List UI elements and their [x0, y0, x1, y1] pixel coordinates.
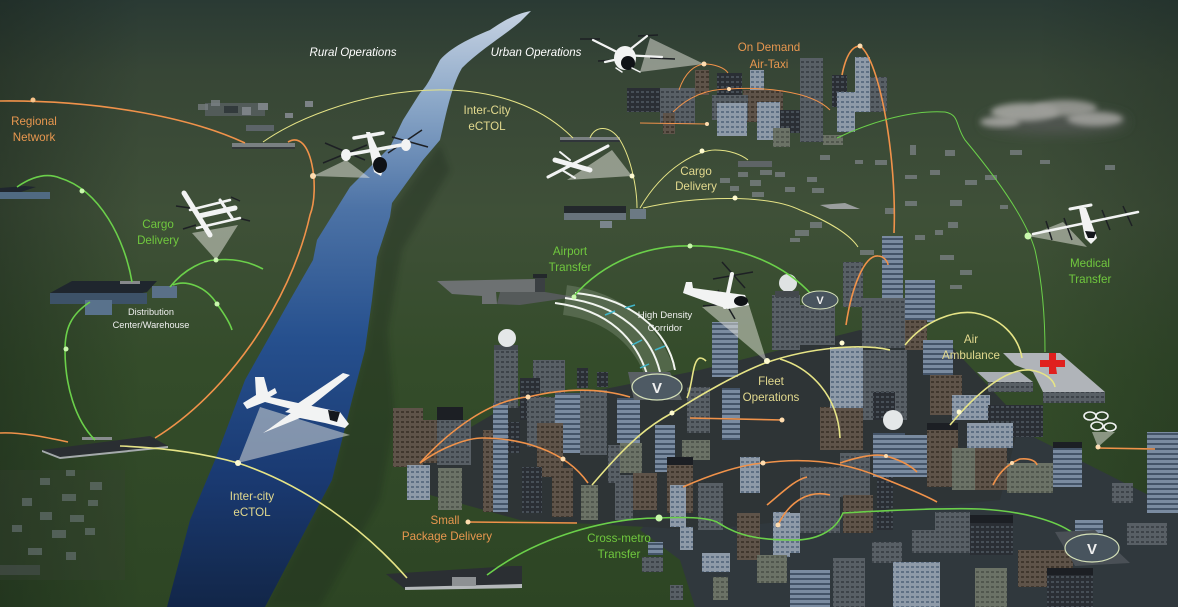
high density corridor — [555, 293, 675, 374]
cloud — [980, 100, 1127, 134]
label: cargo delivery top: Delivery — [675, 180, 717, 193]
vertiport pad: fleet — [802, 291, 838, 309]
hospital — [977, 353, 1105, 403]
vertiport pad: corridor — [628, 372, 682, 400]
cargo terminal and inter-city vertiport — [560, 137, 772, 228]
label: cross-metro transfer: Transfer — [598, 548, 640, 561]
main city towers — [393, 329, 1178, 607]
label: on demand air-taxi: On Demand — [738, 41, 800, 54]
label: medical transfer: Transfer — [1069, 273, 1111, 286]
label: high density corridor: High Density — [638, 310, 692, 321]
label: regional network: Network — [13, 131, 55, 144]
label: distribution center: Center/Warehouse — [113, 320, 189, 330]
label: air ambulance: Air — [964, 333, 978, 346]
label: inter-city eCTOL top: eCTOL — [468, 120, 506, 133]
label: on demand air-taxi: Air-Taxi — [750, 58, 788, 71]
city ground — [640, 420, 1178, 607]
label: fleet operations: Fleet — [758, 375, 785, 388]
label: inter-city eCTOL top: Inter-City — [463, 104, 511, 117]
vertiport pad: south-east — [1055, 530, 1130, 566]
mid city towers — [712, 236, 935, 377]
label: air ambulance: Ambulance — [942, 349, 1000, 362]
label: inter-city eCTOL river: eCTOL — [233, 506, 271, 519]
aircraft: intercity eCTOL over river — [238, 373, 350, 463]
label: cargo delivery top: Cargo — [680, 165, 712, 178]
label: inter-city eCTOL river: Inter-city — [230, 490, 274, 503]
label: distribution center: Distribution — [128, 307, 174, 317]
aircraft: air taxi — [580, 35, 704, 72]
label: rural operations: Rural Operations — [310, 47, 397, 59]
label: cargo delivery left: Delivery — [137, 234, 179, 247]
label: urban operations: Urban Operations — [491, 47, 582, 59]
label: cargo delivery left: Cargo — [142, 218, 174, 231]
orange routes — [0, 46, 1155, 525]
aircraft: delivery drone — [1084, 412, 1116, 447]
aircraft: cargo drone — [176, 193, 250, 260]
vertiport south — [386, 566, 522, 590]
suburban buildings mid-right — [720, 145, 1115, 289]
inner city ground — [415, 330, 1020, 530]
river — [167, 11, 531, 607]
label: fleet operations: Operations — [743, 391, 800, 404]
aircraft: fleet operations — [683, 262, 767, 362]
label: medical transfer: Medical — [1070, 257, 1110, 270]
aircraft: rural tiltrotor — [313, 130, 428, 178]
distant city: on-demand air taxi district — [627, 57, 887, 147]
rural settlement — [198, 100, 313, 149]
route nodes — [30, 44, 1100, 528]
airport runway and terminal — [437, 274, 575, 305]
upper left warehouse — [0, 186, 50, 199]
label: airport transfer: Airport — [553, 245, 588, 258]
southwest settlement — [0, 470, 125, 580]
aircraft: inter-city tiltwing — [548, 146, 632, 180]
yellow routes — [120, 90, 1055, 578]
helipad mid-right — [820, 203, 860, 209]
aircraft: medical transfer — [1028, 205, 1138, 247]
label: high density corridor: Corridor — [648, 323, 683, 334]
vertiport pad: south-east: V — [1087, 541, 1097, 558]
distribution center and warehouse — [50, 281, 177, 315]
label: regional network: Regional — [11, 115, 57, 128]
label: small package delivery: Package Delivery — [402, 530, 492, 543]
green routes — [17, 112, 1073, 575]
label: cross-metro transfer: Cross-metro — [587, 532, 651, 545]
vertiport pad: corridor: V — [652, 380, 662, 397]
label: airport transfer: Transfer — [549, 261, 591, 274]
vertiport pad: fleet: V — [816, 295, 824, 307]
icon: red cross — [1040, 353, 1065, 374]
vertiport left — [42, 436, 168, 459]
river bank shadow — [265, 145, 450, 607]
label: small package delivery: Small — [430, 514, 460, 527]
